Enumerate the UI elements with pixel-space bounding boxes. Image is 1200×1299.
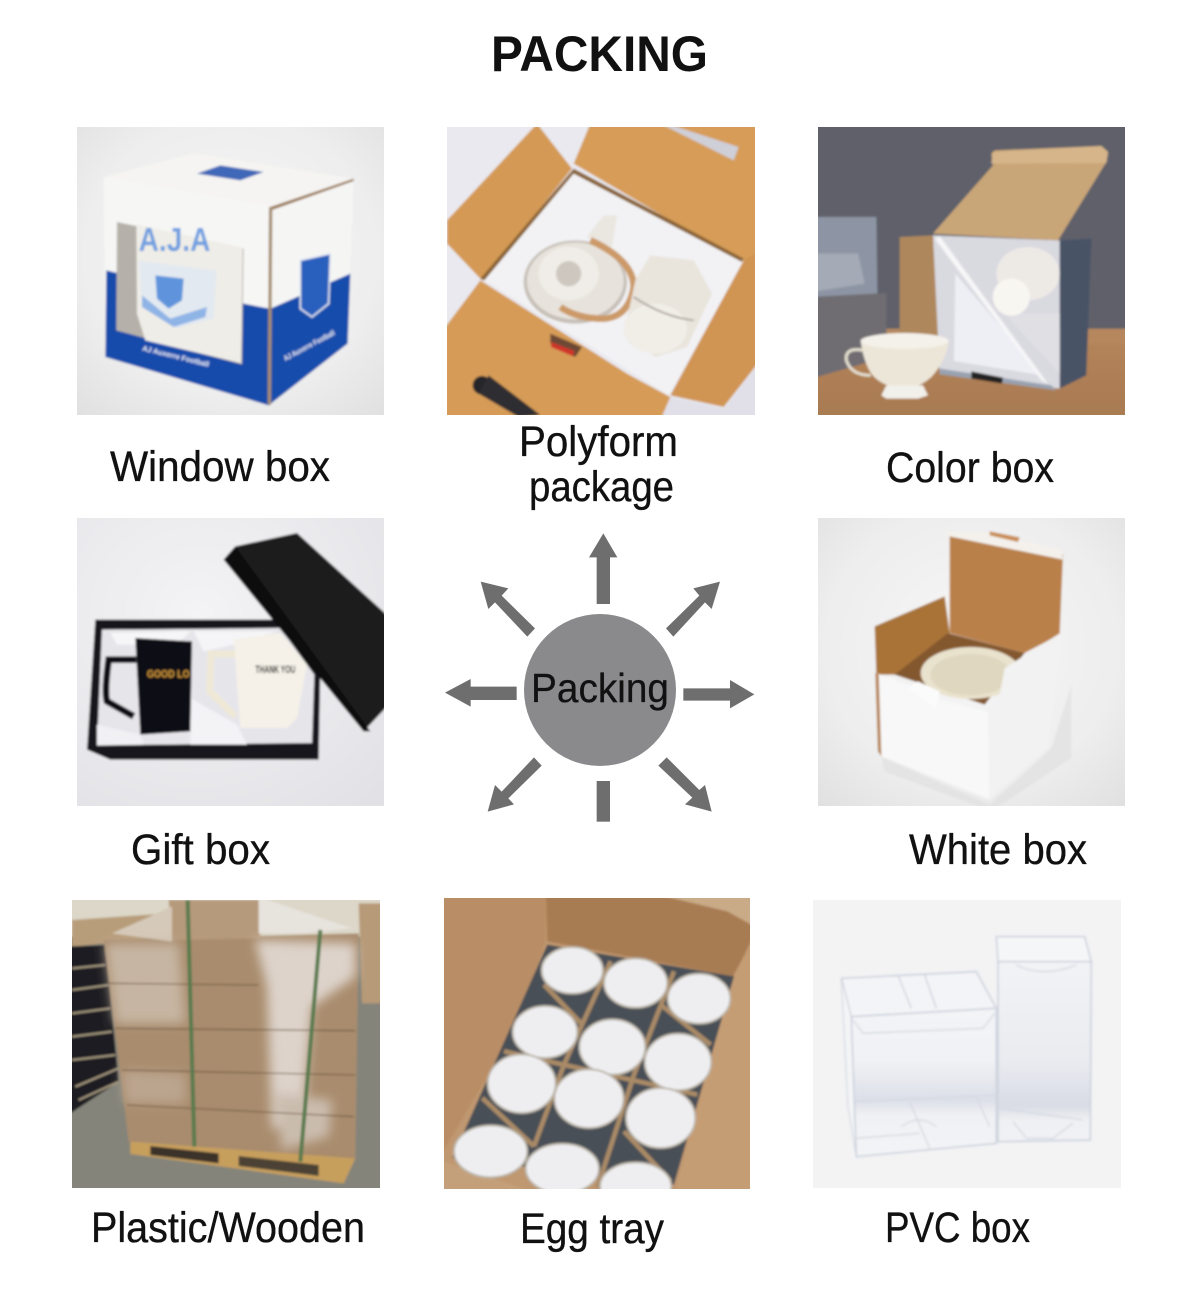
label: plastic/wooden: Plastic/Wooden	[91, 1204, 365, 1252]
arrow: down-right	[658, 757, 712, 812]
cardboard dividers	[482, 961, 711, 1188]
arrows	[445, 533, 754, 822]
panel: color box photo	[811, 120, 1132, 422]
arrow: left	[445, 679, 517, 707]
panel: white box photo	[811, 511, 1132, 813]
panel: polyform package photo	[440, 120, 762, 422]
panel: plastic/wooden pallet photo	[65, 893, 387, 1195]
label: color box: Color box	[886, 444, 1054, 492]
mug tops	[454, 947, 730, 1210]
label: polyform package: package	[529, 463, 674, 511]
label: white box: White box	[909, 826, 1087, 874]
label: egg tray: Egg tray	[520, 1205, 664, 1253]
hub circle	[524, 614, 676, 766]
title: PACKING	[491, 26, 708, 82]
label: polyform package	[519, 418, 678, 511]
hub label: Packing	[531, 665, 669, 711]
front box caption: AJ Auxerre Football	[142, 344, 210, 369]
mug lettering: A.J.A	[139, 222, 210, 259]
label: polyform package: Polyform	[519, 418, 678, 466]
panel: PVC box photo	[806, 893, 1128, 1195]
left PVC box	[841, 972, 996, 1157]
arrow: up-left	[481, 582, 535, 637]
white mug: THANK YOU	[255, 664, 295, 676]
arrow: down-left	[488, 757, 542, 812]
panel: gift box photo	[70, 511, 391, 813]
teapot	[524, 215, 634, 324]
right PVC box	[996, 937, 1091, 1142]
label: gift box: Gift box	[131, 826, 270, 874]
stretch wrap sheen	[105, 940, 355, 1150]
white mug	[210, 633, 307, 728]
arrow: up-right	[666, 582, 720, 637]
panel: window box photo	[70, 120, 391, 422]
label: PVC box: PVC box	[885, 1204, 1030, 1252]
pallet	[130, 1142, 355, 1183]
arrow: down	[597, 781, 610, 822]
nested bowls	[624, 255, 712, 357]
teacup	[846, 333, 949, 399]
side box caption: AJ Auxerre Football	[282, 328, 336, 363]
black mug	[106, 638, 192, 735]
black mug: GOOD LO	[147, 668, 190, 680]
panel: egg tray photo	[444, 898, 750, 1189]
label: window box: Window box	[110, 443, 330, 491]
strapping bands	[188, 900, 320, 1162]
diagram: central packing hub	[445, 533, 754, 822]
arrow: up	[589, 533, 617, 604]
arrow: right	[683, 680, 754, 708]
